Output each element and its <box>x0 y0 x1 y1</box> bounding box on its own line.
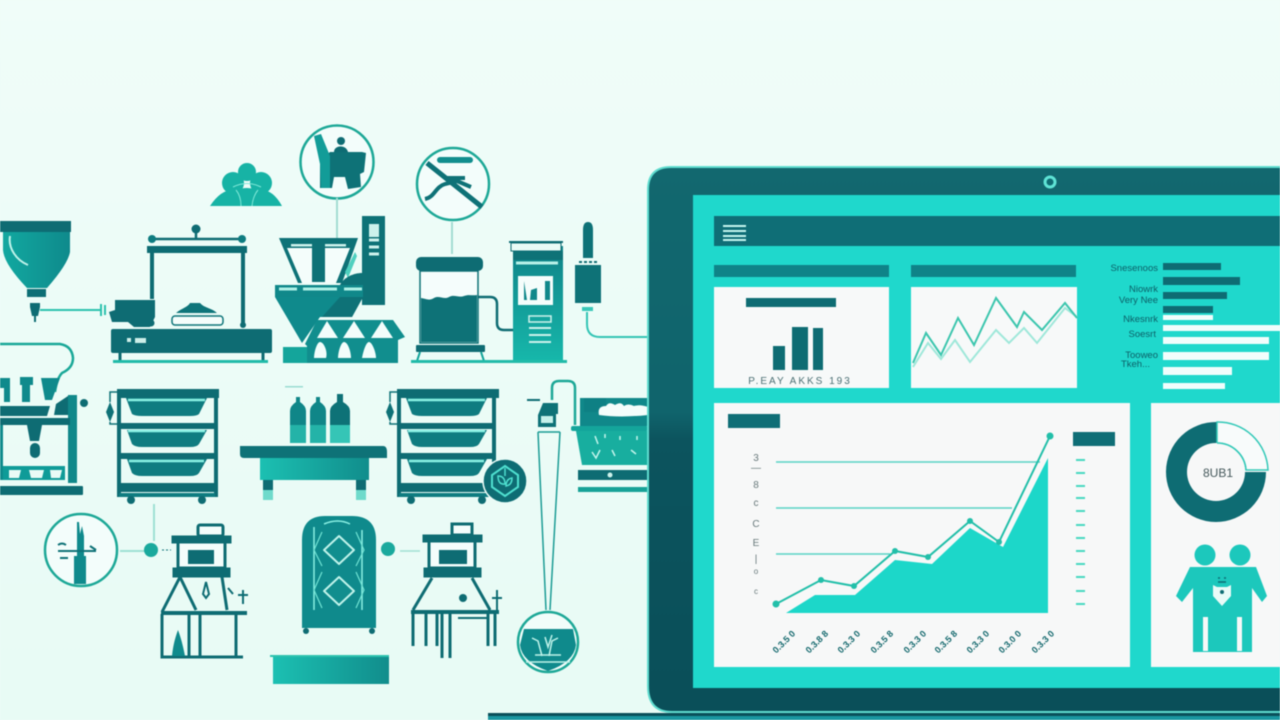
icon: egg tray <box>283 320 405 363</box>
icon: sample circle <box>518 612 578 672</box>
icon: press workstation left <box>161 525 248 657</box>
y axis labels: E <box>753 538 760 549</box>
y axis labels: 3 <box>753 453 759 464</box>
donut label: 8UB1 <box>1203 466 1233 480</box>
laptop bezel <box>648 167 1280 712</box>
panel: donut and people <box>1151 403 1280 667</box>
icon: bottles on table <box>240 386 387 500</box>
icon: control cabinet with chart screen <box>509 242 563 362</box>
icon: tray rack right <box>386 389 499 504</box>
y axis labels: o <box>754 567 759 576</box>
y axis labels: C <box>752 519 760 530</box>
connector line: tools badge <box>451 222 453 254</box>
screen <box>693 195 1280 688</box>
icon: raw material hopper <box>0 221 105 322</box>
x axis labels: 0.3.0 0 <box>997 629 1023 655</box>
ground line: tank and cabinet <box>411 360 567 363</box>
x axis labels <box>771 629 1056 655</box>
camera <box>1045 177 1055 187</box>
x axis labels: 0.3.8 8 <box>804 629 830 655</box>
icon: base block <box>270 655 389 684</box>
list labels: Nkesnrk <box>1123 314 1158 325</box>
icon: leaf badge <box>483 459 527 503</box>
dark bars <box>1163 263 1240 313</box>
icon: circle badge with crossed tools <box>417 148 489 220</box>
y axis labels: c <box>754 498 758 509</box>
connector: badge to press <box>120 504 171 557</box>
icon: ingredient pile <box>210 163 282 206</box>
connector line: operator badge <box>336 198 338 238</box>
list labels: Very Nee <box>1119 295 1158 306</box>
list labels: Snesenoos <box>1110 263 1158 274</box>
y axis labels <box>751 453 761 596</box>
y axis labels: | <box>755 554 757 565</box>
light bars <box>1163 315 1280 389</box>
grid lines <box>776 462 1040 554</box>
right scale ticks <box>1076 460 1085 604</box>
x axis labels: 0.3.5 8 <box>869 629 895 655</box>
donut chart <box>1166 422 1268 522</box>
y axis labels: — <box>751 463 761 474</box>
x axis labels: 0.3.3 0 <box>965 629 991 655</box>
icon: press workstation right <box>411 524 502 658</box>
icon: sealed cabinet unit <box>302 516 376 634</box>
icon: plug with cable to laptop <box>575 222 648 337</box>
list labels: Niowrk <box>1129 284 1158 295</box>
line chart <box>913 298 1077 367</box>
line series <box>772 432 1054 608</box>
chart label: P.EAY AKKS 193 <box>748 376 852 387</box>
panel: main area chart <box>714 403 1130 667</box>
x axis labels: 0.3.3 0 <box>1030 629 1056 655</box>
icon: washing basket machine <box>571 398 648 492</box>
panel: bar chart card <box>714 265 889 388</box>
x axis labels: 0.3.5 0 <box>771 629 797 655</box>
laptop <box>488 167 1280 720</box>
x axis labels: 0.3.3 0 <box>836 629 862 655</box>
y axis labels: 8 <box>753 480 759 491</box>
panel: line chart card <box>911 265 1077 388</box>
list labels <box>1110 263 1158 370</box>
connector: cabinet to press <box>381 542 420 556</box>
icon: liquid tank <box>416 257 514 361</box>
icon: circle badge with valve <box>45 514 117 586</box>
list labels: Tkeh... <box>1121 359 1150 370</box>
icon: tray rack left <box>106 389 219 504</box>
y axis labels: c <box>754 587 758 596</box>
bar chart <box>773 327 823 370</box>
panel: horizontal bar list <box>1110 263 1280 389</box>
icon: funnel and grinder <box>275 216 385 343</box>
list labels: Soesrt <box>1129 329 1156 340</box>
x axis labels: 0.3.5 8 <box>933 629 959 655</box>
x axis labels: 0.3.3 0 <box>902 629 928 655</box>
dashboard header bar <box>714 216 1280 246</box>
icon: filling machine <box>0 344 88 495</box>
icon: conveyor press machine <box>109 224 272 363</box>
icon: two people <box>1176 544 1267 652</box>
area series <box>786 458 1048 613</box>
icon: menu <box>723 226 746 240</box>
icon: circle badge with operator <box>300 126 374 198</box>
list labels: Tooweo <box>1125 350 1158 361</box>
icon: sensor with hose and cone <box>527 381 575 610</box>
laptop base <box>488 713 1280 716</box>
